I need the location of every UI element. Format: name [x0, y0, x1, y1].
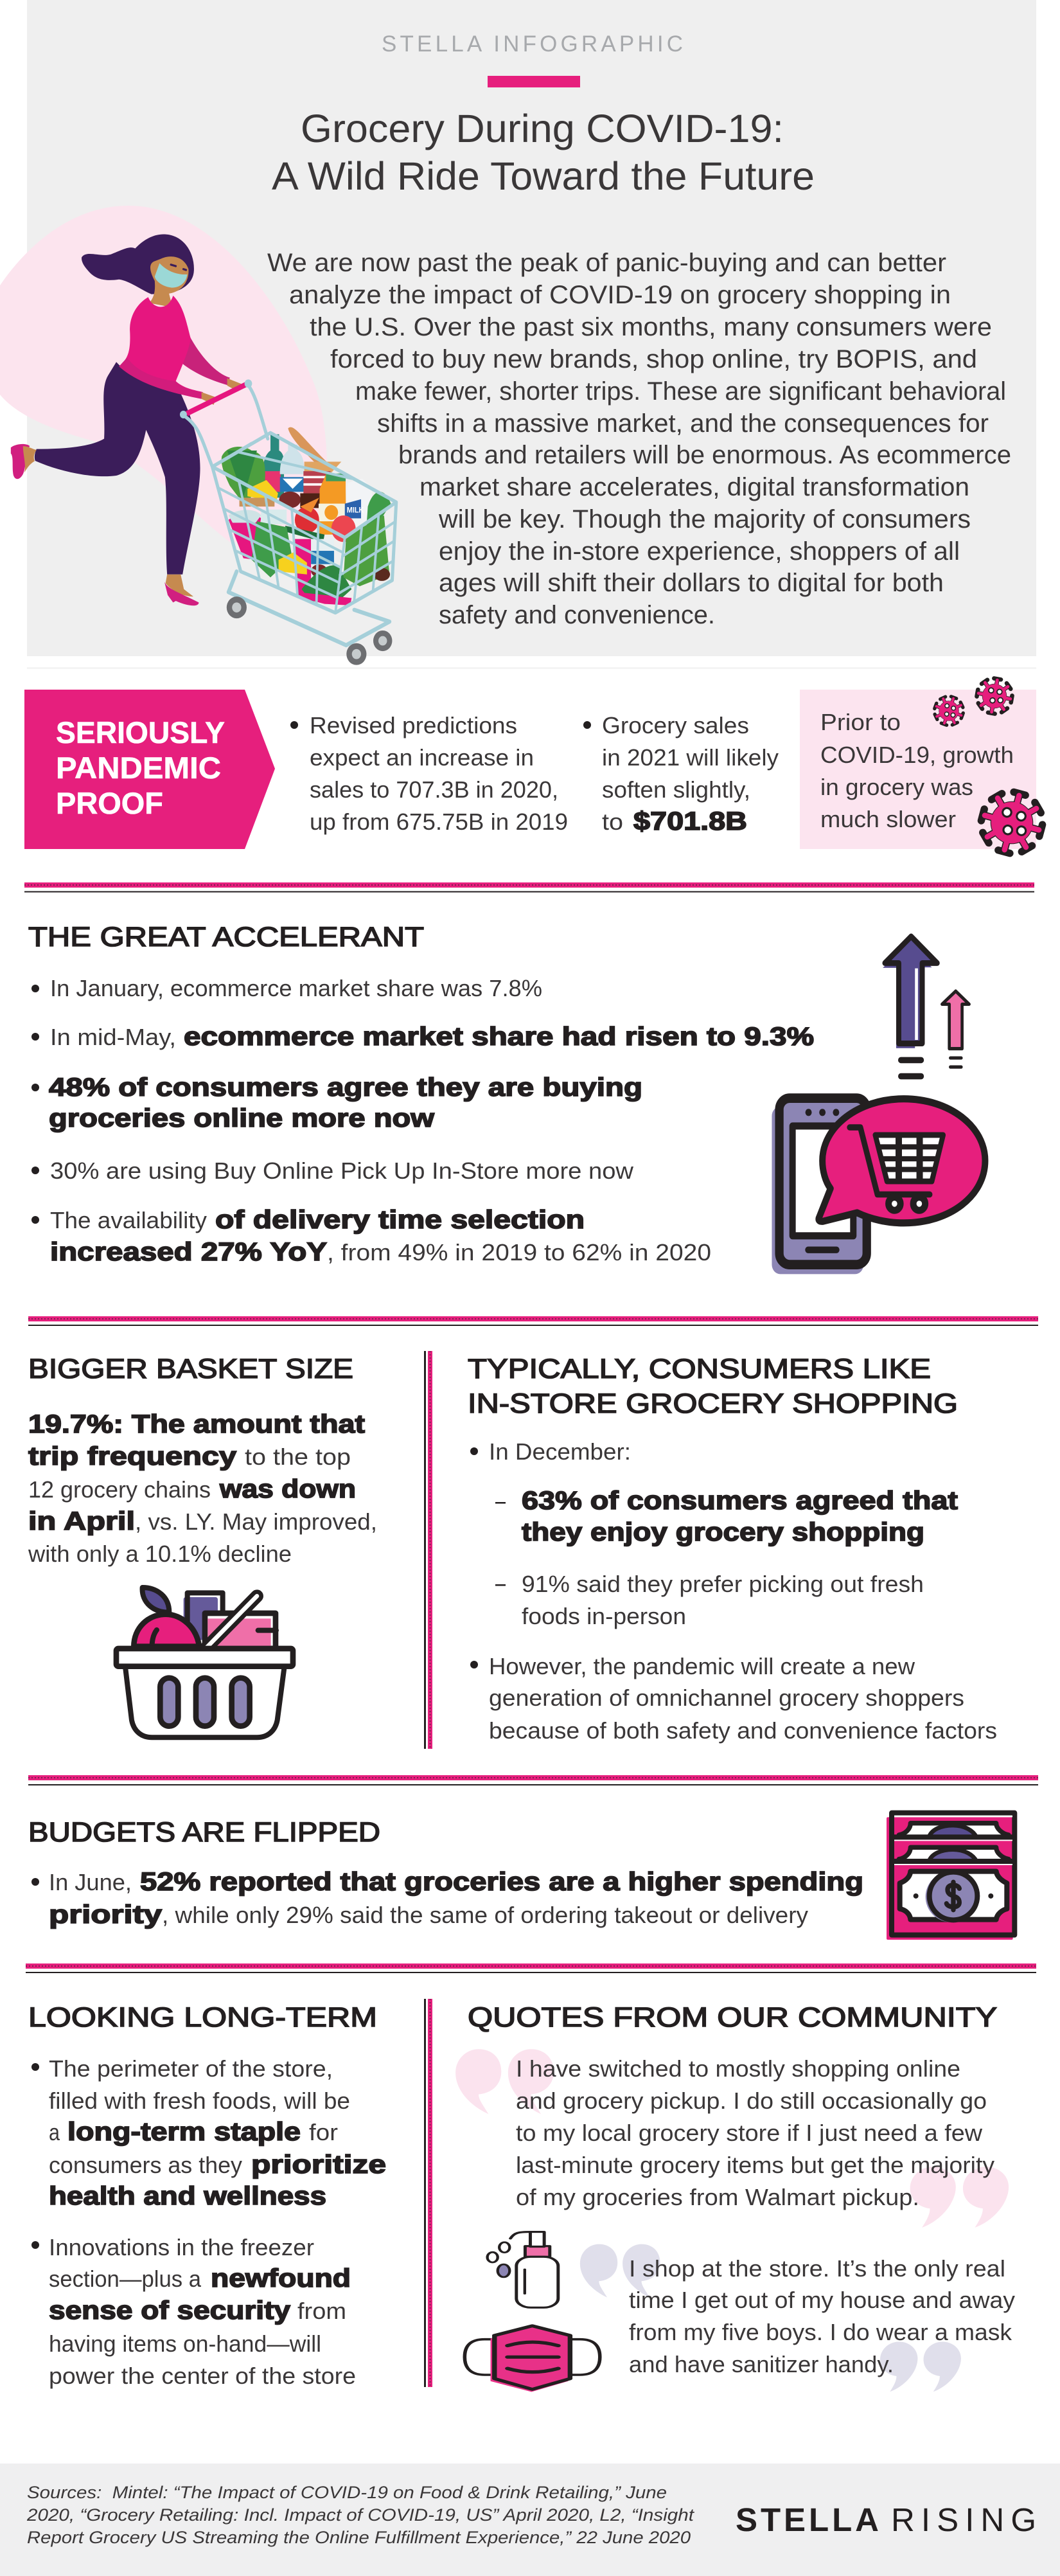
heading: BUDGETS ARE FLIPPED	[28, 1817, 380, 1848]
bullet text: In June,	[49, 1869, 132, 1895]
intro paragraph	[267, 249, 1011, 629]
quote 1	[516, 2055, 994, 2210]
panel: seriously pandemic proof	[24, 676, 1048, 859]
bullet: grocery sales 2021: in 2021 will likely	[602, 744, 779, 771]
intro paragraph: We are now past the peak of panic-buying and can better	[267, 249, 946, 277]
bullet list: , from 49% in 2019 to 62% in 2020	[327, 1239, 711, 1266]
icon: hand sanitizer	[488, 2232, 558, 2307]
bullet list: In December:	[489, 1438, 631, 1465]
bullet text: priority	[49, 1901, 163, 1929]
icon: up arrows, phone and shopping cart bubble	[772, 936, 985, 1274]
accent bar	[488, 76, 580, 87]
title: Grocery During COVID-19:	[301, 107, 784, 150]
heading: QUOTES FROM OUR COMMUNITY	[468, 2002, 997, 2033]
heading: BIGGER BASKET SIZE	[28, 1354, 353, 1384]
quote 1: of my groceries from Walmart pickup.	[516, 2184, 919, 2210]
callout: prior to covid: COVID-19, growth	[820, 742, 1014, 768]
bullet list	[470, 1438, 997, 1744]
panel: typically consumers like in-store shopping	[468, 1354, 997, 1744]
bullet list: The availability	[50, 1207, 207, 1233]
intro paragraph: the U.S. Over the past six months, many consumers were	[310, 313, 992, 341]
bullet list: foods in-person	[522, 1603, 686, 1629]
bullet list: ecommerce market share had risen to 9.3%	[184, 1023, 814, 1051]
intro paragraph: enjoy the in-store experience, shoppers of all	[439, 537, 960, 566]
blob behind shopper	[0, 206, 327, 543]
shopping cart frame	[184, 384, 396, 645]
icon: small arrow	[942, 991, 969, 1067]
bullet text	[31, 1868, 863, 1929]
title: A Wild Ride Toward the Future	[272, 154, 815, 198]
bullet: grocery sales 2021: $701.8B	[633, 807, 747, 836]
intro paragraph: shifts in a massive market, and the consequences for	[377, 409, 989, 438]
bullet list	[31, 975, 814, 1266]
bullet: freezer innovations: section—plus a	[49, 2266, 202, 2292]
callout: prior to covid: much slower	[820, 806, 956, 832]
bullet: freezer innovations: having items on-hand—will	[49, 2330, 321, 2357]
bullet: revised predictions: sales to 707.3B in 2020,	[310, 776, 558, 803]
quote 1: and grocery pickup. I do still occasionally go	[516, 2088, 987, 2114]
intro paragraph: ages will shift their dollars to digital for both	[439, 569, 944, 597]
panel: budgets are flipped	[28, 1813, 1014, 1940]
bullet list: 91% said they prefer picking out fresh	[522, 1571, 924, 1597]
icon: face mask	[464, 2326, 600, 2392]
icon: big arrow	[883, 936, 937, 1077]
intro paragraph: analyze the impact of COVID-19 on grocery shopping in	[289, 281, 951, 309]
bullet list: In January, ecommerce market share was 7.8%	[50, 975, 542, 1001]
bullet list: they enjoy grocery shopping	[522, 1518, 924, 1546]
heading	[468, 1354, 958, 1419]
icons: virus particles	[931, 676, 1048, 859]
callout: prior to covid: in grocery was	[820, 774, 973, 800]
bullet: perimeter of the store: filled with fresh foods, will be	[49, 2088, 350, 2114]
title	[272, 107, 815, 198]
bullet: freezer innovations: power the center of the store	[49, 2363, 356, 2389]
bullet: grocery sales 2021: Grocery sales	[602, 712, 749, 738]
intro paragraph: market share accelerates, digital transformation	[420, 473, 969, 501]
bullet: perimeter of the store: consumers as they	[49, 2152, 242, 2178]
logo: stella rising: STELLA	[736, 2501, 879, 2538]
sources: 2020, “Grocery Retailing: Incl. Impact of COVID-19, US” April 2020, L2, “Insight	[26, 2505, 695, 2525]
bullet: revised predictions: expect an increase in	[310, 744, 534, 771]
eyebrow label: STELLA INFOGRAPHIC	[382, 31, 683, 57]
intro paragraph: make fewer, shorter trips. These are significant behavioral	[355, 377, 1006, 406]
panel: quotes from our community	[455, 2002, 1015, 2392]
bullet: freezer innovations	[31, 2234, 356, 2389]
bullet: perimeter of the store: The perimeter of the store,	[49, 2055, 333, 2082]
heading: IN-STORE GROCERY SHOPPING	[468, 1388, 958, 1419]
bullet list: groceries online more now	[49, 1104, 435, 1132]
heading: THE GREAT ACCELERANT	[28, 922, 424, 953]
sources: Report Grocery US Streaming the Online Fulfillment Experience,” 22 June 2020	[27, 2528, 691, 2547]
sources: Sources: Mintel: “The Impact of COVID-19 on Food & Drink Retailing,” June	[27, 2483, 667, 2502]
cart wheels	[227, 596, 392, 665]
quote 1: I have switched to mostly shopping online	[516, 2055, 960, 2082]
intro paragraph: brands and retailers will be enormous. As ecommerce	[398, 441, 1011, 469]
pink arrow banner: PROOF	[56, 786, 163, 820]
icon: speech bubble with cart	[818, 1099, 985, 1223]
quote 2	[629, 2255, 1015, 2377]
bullet: grocery sales 2021: soften slightly,	[602, 776, 750, 803]
bullet list: increased 27% YoY	[50, 1238, 327, 1266]
panel: bigger basket size	[28, 1354, 377, 1737]
stat text: in April	[28, 1507, 135, 1535]
stat text: trip frequency	[28, 1442, 237, 1471]
bullet: freezer innovations: Innovations in the freezer	[49, 2234, 314, 2260]
bullet: freezer innovations: sense of security	[49, 2296, 291, 2325]
bullet: revised predictions: up from 675.75B in 2019	[310, 809, 568, 835]
cart handle	[186, 384, 247, 414]
stat text: with only a 10.1% decline	[28, 1541, 292, 1567]
illustration: woman with mask pushing shopping cart	[11, 234, 396, 665]
bullet: perimeter of the store: a	[49, 2119, 60, 2145]
logo: stella rising	[736, 2501, 1036, 2538]
pink arrow banner: PANDEMIC	[56, 751, 221, 785]
quote 1: last-minute grocery items but get the majority	[516, 2152, 994, 2178]
groceries	[222, 427, 391, 605]
bullet: grocery sales 2021	[583, 712, 779, 836]
logo: stella rising: RISING	[891, 2501, 1036, 2538]
bullet: perimeter of the store: prioritize	[251, 2151, 386, 2179]
bullet: freezer innovations: from	[297, 2298, 346, 2324]
bullet list: of delivery time selection	[215, 1206, 585, 1234]
bullet list: 63% of consumers agreed that	[522, 1487, 958, 1515]
bullet: revised predictions	[290, 712, 568, 835]
pink arrow banner	[24, 690, 275, 849]
icon: grocery basket	[116, 1588, 293, 1737]
panel: looking long-term	[28, 2002, 386, 2389]
quote 2: and have sanitizer handy.	[629, 2351, 894, 2377]
bullet list: generation of omnichannel grocery shoppers	[489, 1685, 964, 1711]
heading: TYPICALLY, CONSUMERS LIKE	[468, 1354, 931, 1384]
bullet: perimeter of the store: for	[309, 2119, 338, 2145]
bullet: grocery sales 2021: to	[602, 809, 623, 835]
bullet list: However, the pandemic will create a new	[489, 1653, 915, 1679]
footer	[0, 2464, 1060, 2576]
bullet list: 48% of consumers agree they are buying	[49, 1073, 642, 1102]
bullet: perimeter of the store: long-term staple	[67, 2118, 301, 2146]
intro paragraph: will be key. Though the majority of consumers	[438, 505, 971, 533]
bullet text: , while only 29% said the same of ordering takeout or delivery	[162, 1902, 808, 1928]
bullet list: 30% are using Buy Online Pick Up In-Store more now	[50, 1158, 634, 1184]
quote 1: to my local grocery store if I just need a few	[516, 2120, 983, 2146]
quote 2: from my five boys. I do wear a mask	[629, 2319, 1012, 2345]
groceries: MILK	[347, 506, 364, 514]
intro paragraph: safety and convenience.	[439, 601, 715, 629]
bullet: perimeter of the store	[31, 2055, 386, 2210]
bullet list: In mid-May,	[50, 1024, 176, 1050]
stat text: 12 grocery chains	[28, 1476, 211, 1503]
woman	[11, 234, 242, 605]
intro paragraph: forced to buy new brands, shop online, try BOPIS, and	[330, 345, 977, 373]
bullet: perimeter of the store: health and wellness	[49, 2182, 326, 2210]
icon: stack of money	[887, 1813, 1014, 1940]
stat text: , vs. LY. May improved,	[135, 1508, 377, 1535]
callout: prior to covid	[800, 690, 1036, 849]
quote 2: time I get out of my house and away	[629, 2287, 1015, 2313]
sources	[26, 2483, 695, 2547]
stat text: 19.7%: The amount that	[28, 1410, 365, 1438]
stat text: was down	[219, 1475, 356, 1503]
quotation marks background	[455, 2049, 1009, 2392]
stat text	[28, 1410, 377, 1567]
panel: intro header	[0, 0, 1036, 669]
pink arrow banner: SERIOUSLY	[56, 715, 225, 749]
heading: LOOKING LONG-TERM	[28, 2002, 377, 2033]
icon: phone	[772, 1098, 867, 1274]
stat text: to the top	[245, 1444, 351, 1470]
quote 2: I shop at the store. It’s the only real	[629, 2255, 1005, 2282]
bullet: freezer innovations: newfound	[211, 2264, 351, 2293]
bullet list: because of both safety and convenience factors	[489, 1717, 997, 1744]
callout: prior to covid: Prior to	[820, 709, 901, 735]
panel: the great accelerant	[28, 922, 985, 1274]
bullet text: 52% reported that groceries are a higher spending	[140, 1868, 863, 1896]
bullet: revised predictions: Revised predictions	[310, 712, 517, 738]
